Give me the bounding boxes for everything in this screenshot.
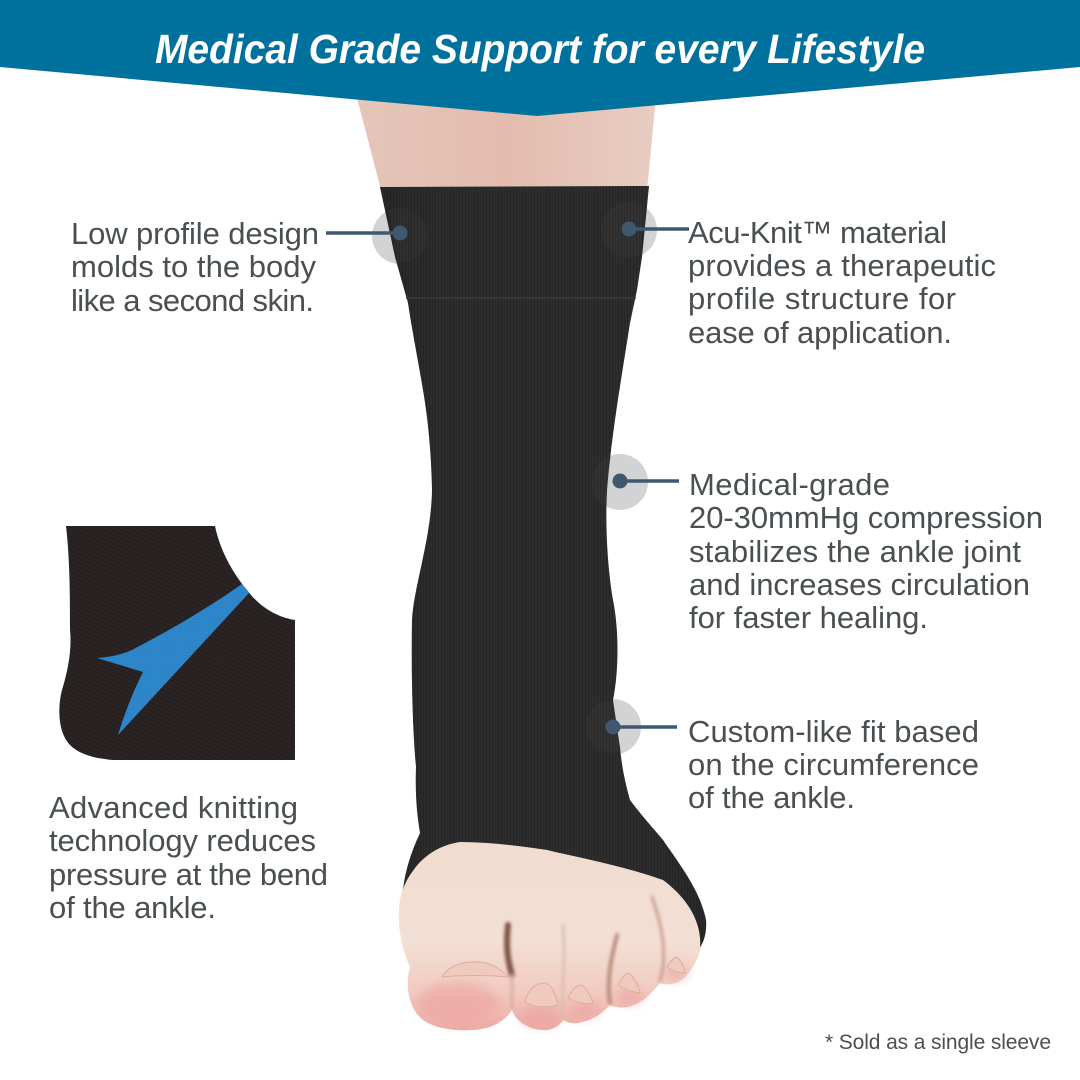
callout: Acu-Knit material [622,215,1005,350]
grey hotspot halos behind the sleeve [372,202,657,755]
callout text: provides a therapeutic [688,248,996,283]
black sock heel [59,526,295,760]
callout text: 20-30mmHg compression [689,500,1043,535]
leader line and dot [606,720,677,734]
callout text: Low profile design [71,216,319,251]
header banner [0,0,1080,116]
callout text: molds to the body [71,249,316,284]
upper leg skin [357,98,656,190]
callout text: for faster healing. [689,600,928,635]
translucent halo overlay on sleeve [389,202,645,753]
callout text: Acu-Knit™ material [688,215,947,250]
callout text: stabilizes the ankle joint [689,534,1021,569]
leader line and dot [326,226,408,240]
callout text: profile structure for [688,281,956,316]
leader line and dot [612,474,679,488]
product photo: leg with ankle sleeve [357,98,706,1030]
toe tip blush [418,963,688,1026]
leader line and dot [622,222,689,236]
blue flex panel [97,584,249,735]
callout text: ease of application. [688,315,952,350]
inset caption: of the ankle. [49,890,216,925]
footnote: * Sold as a single sleeve [825,1031,1051,1054]
black ankle sleeve [380,186,706,947]
callout text: and increases circulation [689,567,1030,602]
inset caption: pressure at the bend [49,857,328,892]
callout text: Custom-like fit based [688,714,979,749]
callout text: on the circumference [688,747,979,782]
title: Medical Grade Support for every Lifestyle [155,26,925,72]
callout text: Medical-grade [689,467,890,502]
callout: low profile design [71,216,408,318]
callout: custom-like fit [606,714,988,815]
inset caption: Advanced knitting [49,790,298,825]
inset caption: technology reduces [49,823,316,858]
toenails [442,957,685,1007]
callout text: of the ankle. [688,780,855,815]
inset: ankle bend close-up [59,526,295,760]
toe separations [507,897,664,1018]
callout text: like a second skin. [71,283,314,318]
callout: medical-grade compression [612,467,1052,635]
foot and toes [399,835,706,1030]
